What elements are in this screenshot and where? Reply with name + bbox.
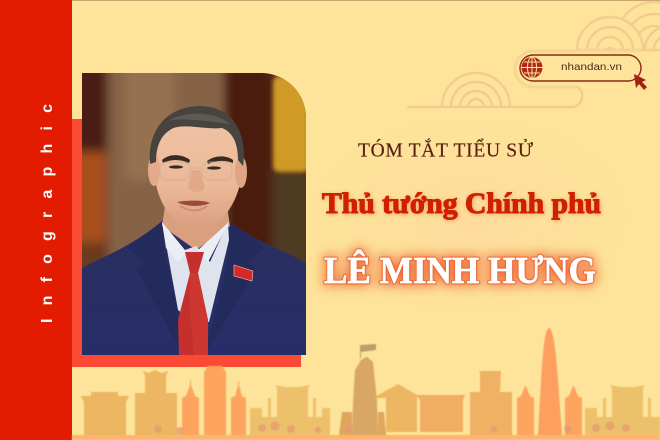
connector line (407, 86, 582, 107)
photo backdrop (82, 73, 306, 268)
ears (148, 154, 160, 186)
orange frame behind portrait (72, 119, 301, 367)
website text: nhandan.vn (561, 61, 622, 73)
building: temple gate (135, 370, 177, 435)
vertical label: Infographic: Infographic (39, 104, 56, 323)
top-right cloud arches (577, 2, 660, 50)
shrubs (154, 422, 630, 435)
left red band (0, 0, 72, 440)
face (156, 126, 240, 214)
building: left temple group (250, 385, 330, 435)
heading line 2: Thủ tướng Chính phủ (322, 187, 601, 220)
neck (162, 208, 230, 248)
tower: centre small right (565, 386, 582, 435)
hair (150, 106, 244, 166)
decorative arches and link line (407, 2, 660, 107)
nose and mouth (188, 170, 205, 192)
suit jacket (82, 220, 306, 356)
tower: small left (182, 380, 199, 435)
small arch (442, 73, 510, 107)
ground (72, 435, 660, 440)
icon: globe (522, 57, 542, 78)
building: left hall (81, 392, 129, 435)
lapel flag pin (234, 265, 253, 281)
eyebrows and eyes (162, 155, 233, 170)
building: right temple group (585, 385, 660, 435)
glasses (160, 162, 232, 180)
heading line 3: name: LÊ MINH HƯNG (324, 250, 596, 292)
website pill (515, 51, 647, 90)
portrait photo (82, 73, 306, 355)
heading line 2: Thủ tướng Chính phủ (323, 188, 602, 221)
pavilion (373, 384, 417, 432)
tower: tall spire (538, 328, 562, 435)
building: centre temple (470, 371, 512, 435)
red tie (178, 252, 208, 356)
flag tower (339, 344, 386, 435)
heading line 3: name: LÊ MINH HƯNG (324, 250, 596, 292)
tower: tall left (204, 366, 226, 435)
tower: small right (231, 381, 246, 435)
heading line 3: name: LÊ MINH HƯNG (324, 250, 596, 292)
shirt collar (162, 222, 229, 322)
tower: centre small left (517, 386, 534, 435)
heading line 1: TÓM TẮT TIỂU SỬ (358, 140, 534, 162)
jacket lapels (148, 223, 261, 349)
icon: cursor arrow (634, 74, 647, 90)
skyline (72, 328, 660, 440)
building: centre hall (416, 395, 465, 432)
